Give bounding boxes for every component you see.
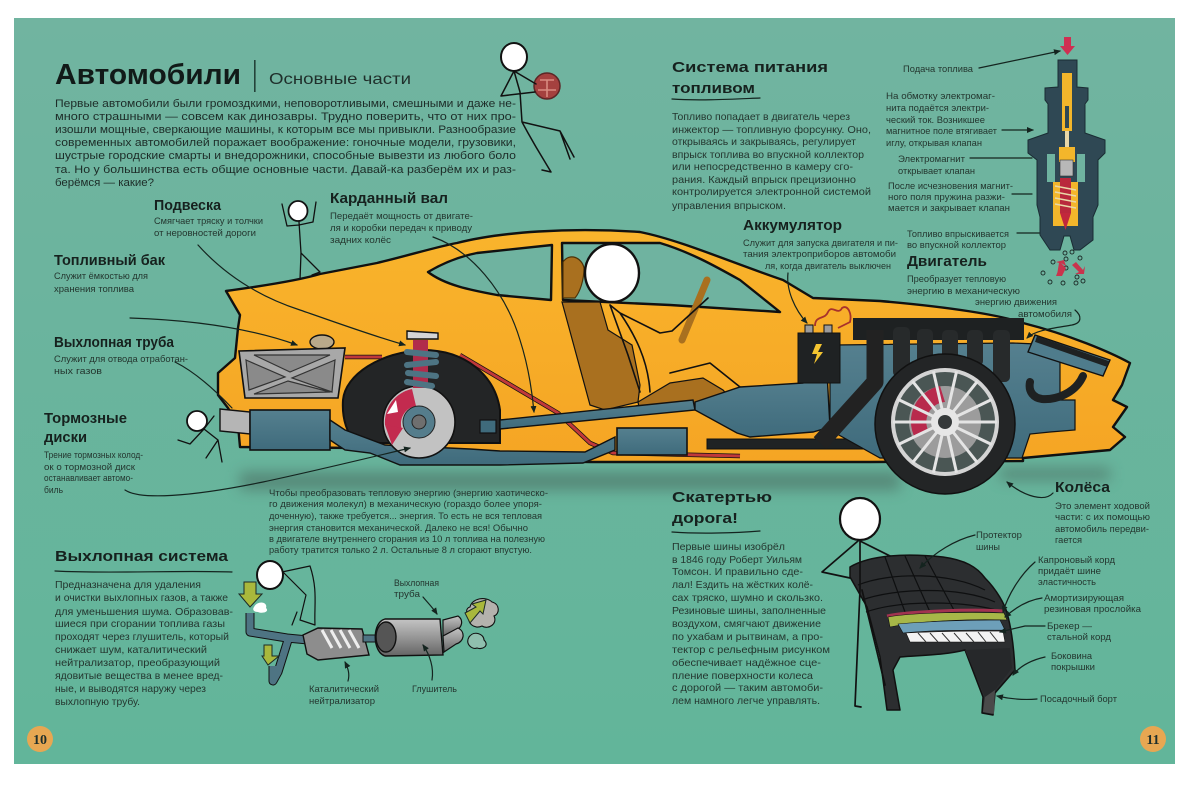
label: brake discs: диски [44,429,87,446]
exhaust system diagram: Глушитель [412,684,457,695]
heading: Скатертью [672,489,772,506]
label: wheels: части: с их помощью [1055,512,1150,523]
label: brake discs: останавливает автомо- [44,473,133,484]
paragraph: thermal energy: доченную), также требуется... энергия. То есть не вся тепловая [269,511,542,522]
label: wheels: гается [1055,535,1082,546]
exhaust system diagram [239,561,498,707]
intro paragraph: изошли мощные, сверкающие машины, к которым все мы привыкли. Разнообразие [55,124,516,136]
tire arrows [920,535,1045,699]
diagram labels: Выхлопная [394,578,439,589]
arrow: driveshaft [433,237,534,412]
icon: stick figure with steering wheel [501,43,574,172]
body text: лем намного легче управлять. [672,695,820,707]
injector labels: Электромагнит [898,154,966,165]
body text: нейтрализатор, преобразующий [55,657,220,669]
injector labels: ного поля пружина разжи- [888,192,1005,203]
injector diagram [1028,37,1105,285]
intro paragraph: та. Но у большинства есть общие основные части. Давай-ка разберём их и раз- [55,164,516,176]
injector labels [886,64,1013,251]
body text: Топливо попадает в двигатель через [672,111,850,123]
icon: stick figure on tire [822,498,890,707]
body text: по ухабам и рытвинам, а про- [672,631,824,643]
tire labels: резиновая прослойка [1044,604,1142,615]
label: battery: ля, когда двигатель выключен [765,261,891,272]
heading: Выхлопная система [55,548,229,565]
arrow: brake discs [125,448,410,496]
intro paragraph: современных автомобилей поражает воображение: гоночные модели, грузовики, [55,137,516,149]
rubber layer [887,610,1003,616]
label: exhaust pipe: ных газов [54,366,102,377]
injector fuel channel [1062,73,1072,131]
title: Автомобили [55,59,241,91]
battery [798,307,851,383]
catalytic converter [303,628,369,660]
body text: ные, и выводятся наружу через [55,683,206,695]
label: wheels: автомобиль передви- [1055,524,1149,535]
arrow: engine [1027,310,1080,338]
label: brake discs: ок о тормозной диск [44,462,136,473]
exhaust tail pipe [220,409,250,434]
paragraph: thermal energy: Чтобы преобразовать тепловую энергию (энергию хаотическо- [269,488,548,499]
transmission [695,373,830,437]
injector labels: На обмотку электромаг- [886,91,995,102]
body text: Резиновые шины, заполненные [672,605,826,617]
front muffler [617,428,687,455]
exhaust system diagram: нейтрализатор [309,696,375,707]
page number 10: 10 [33,733,47,748]
arrow: exhaust pipe [175,362,232,408]
arrow: suspension [198,245,405,345]
label: battery: Аккумулятор [743,217,842,234]
tire labels: покрышки [1051,662,1095,673]
tail pipes [443,616,463,652]
tire inner sidewall [965,648,1012,697]
label: suspension: Подвеска [154,197,222,214]
label: wheels: Колёса [1055,479,1111,496]
body text: тектор с рельефным рисунком [672,644,830,656]
label: wheels: Это элемент ходовой [1055,501,1150,512]
label: exhaust pipe: Служит для отвода отработан- [54,354,188,365]
label: brake discs: Тормозные [44,410,127,427]
tire labels: эластичность [1038,577,1096,588]
tire labels: стальной корд [1047,632,1111,643]
injector labels: Топливо впрыскивается [907,229,1009,240]
label: engine: автомобиля [1018,309,1072,320]
stick figure [257,561,315,625]
injector labels: во впускной коллектор [907,240,1006,251]
label: driveshaft: ля и коробки передач к приводу [330,223,472,234]
label: driveshaft: задних колёс [330,235,391,246]
tire labels: Протектор [976,530,1022,541]
icon: stick figure near brake discs [178,411,222,462]
label: engine [907,253,1072,320]
intro paragraph: берёмся — какие? [55,177,154,189]
body text: выхлопную трубу. [55,696,140,708]
injector labels: нита подаётся электри- [886,103,989,114]
car illustration [218,230,1130,494]
body text: сах тряско, шумно и скользко. [672,592,823,604]
label: brake discs: Трение тормозных колод- [44,450,143,461]
body text: и очистки выхлопных газов, а также [55,592,228,604]
front wheel [875,354,1015,494]
seat [562,257,730,412]
label: suspension: от неровностей дороги [154,228,256,239]
injector labels: Подача топлива [903,64,974,75]
body text: шиеся при сгорании топлива газы [55,618,225,630]
heading underline [55,571,232,572]
tire diagram [850,555,1015,715]
injector labels: магнитное поле втягивает [886,126,998,137]
label: suspension: Смягчает тряску и толчки [154,216,263,227]
drive shaft [500,400,695,429]
label: exhaust pipe: Выхлопная труба [54,334,175,351]
body text: ядовитые вещества в менее вред- [55,670,223,682]
section: tires heading and text [672,489,830,707]
body text [672,541,830,707]
body text: для уменьшения шума. Образовав- [55,606,234,618]
injector arrows [970,51,1060,233]
label: fuel tank [54,252,165,295]
page number 10 [27,726,53,752]
body text: Первые шины изобрёл [672,541,785,553]
exhaust pipe [330,420,615,465]
injector labels: мается и закрывает клапан [888,203,1010,214]
label: brake discs: биль [44,485,63,496]
tire labels: Брекер — [1047,621,1093,632]
title divider [254,60,256,92]
injector windows [1047,154,1055,182]
lower black rod [707,439,887,449]
label: suspension [154,197,263,239]
tire labels: Амортизирующая [1044,593,1124,604]
connecting pipe [363,635,381,642]
body text: в 1846 году Роберт Уильям [672,554,802,566]
label: exhaust pipe [54,334,188,377]
tire labels: Боковина [1051,651,1093,662]
body text: контролируется электронной системой [672,186,871,198]
injector body [1028,60,1105,250]
label: engine: энергию в механическую [907,286,1020,297]
icon: stick figure near suspension [282,201,320,280]
diagram arrows [423,597,437,614]
fuel feed arrow [1060,37,1075,55]
arrow: fuel tank [130,318,297,345]
body text: инжектор — топливную форсунку. Оно, [672,124,871,136]
driver figure [585,244,780,410]
label: engine: Преобразует тепловую [907,274,1006,285]
label: engine: Двигатель [907,253,987,270]
body text: воздухом, смягчают движение [672,618,821,630]
section: tires heading and text: дорога! [672,510,738,527]
rear muffler [250,410,330,450]
tire bead [983,690,995,714]
label: fuel tank: хранения топлива [54,284,135,295]
body text: впрыск топлива во впускной коллектор [672,149,864,161]
paragraph: thermal energy: в двигателе внутреннего сгорания из 10 л топлива на полезную [269,534,545,545]
label: driveshaft: Передаёт мощность от двигате- [330,211,473,222]
label: wheels [1055,479,1150,546]
label: battery: тания электроприборов автомоби [743,249,896,260]
section: exhaust system [55,548,234,708]
body text: обеспечивает надёжное сце- [672,657,822,669]
body text: с дорогой — таким автомоби- [672,682,824,694]
body text: пление поверхности колеса [672,670,813,682]
arrow: battery [788,273,807,323]
exhaust system diagram: Каталитический [309,684,379,695]
nylon cord layer [888,612,1007,627]
label: driveshaft: Карданный вал [330,190,448,207]
label: fuel tank: Служит ёмкостью для [54,271,148,282]
body text [55,579,234,708]
label: driveshaft [330,190,473,246]
paragraph: thermal energy: работу тратится только 2 л. Остальные 8 л сгорают впустую. [269,545,532,556]
radiator [1028,335,1110,399]
smoke puff [253,603,267,613]
fuel tank [239,335,345,398]
page number 11 [1140,726,1166,752]
tire cross-section [850,555,1015,715]
rear wheel arch [343,350,500,443]
section: fuel system [672,59,871,212]
intro paragraph: много страшными — совсем как динозавры. Трудно поверить, что от них про- [55,111,516,123]
exhaust clouds [467,599,498,649]
steel cord hatching [918,632,998,642]
body text: лал! Ездить на жёстких колё- [672,579,813,591]
label: engine: энергию движения [975,297,1057,308]
injector labels: открывает клапан [898,166,975,177]
injector spring chamber [1053,182,1078,213]
exhaust piping [250,613,308,681]
injector valve [1060,160,1073,176]
green arrows [239,582,486,665]
rear brake assembly [383,386,455,458]
body text: или непосредственно в камеру сго- [672,161,854,173]
body text: Томсон. И правильно сде- [672,566,804,578]
intro paragraph: Первые автомобили были громоздкими, неповоротливыми, смешными и даже не- [55,98,516,110]
injector labels: ческий ток. Возникшее [886,115,985,126]
steel cord layer [906,631,1005,642]
injector labels: иглу, открывая клапан [886,138,982,149]
intro paragraph: шустрые городские смарты и внедорожники, способные вывезти из любого боло [55,150,516,162]
front side window [562,243,780,312]
tire labels: шины [976,542,1000,553]
subtitle: Основные части [269,71,411,88]
tire labels: придаёт шине [1038,566,1101,577]
body text: Предназначена для удаления [55,579,201,591]
label: battery: Служит для запуска двигателя и пи- [743,238,898,249]
tire labels [976,530,1142,705]
intro paragraph [55,98,516,189]
heading underline [672,531,760,533]
label: fuel tank: Топливный бак [54,252,165,269]
tire labels: Посадочный борт [1040,694,1118,705]
body text: снижает шум, каталитический [55,644,207,656]
exhaust system diagram: труба [394,589,421,600]
label: battery [743,217,898,272]
engine bay [820,318,1075,458]
arrow: wheels [1007,482,1053,497]
car body [218,230,1130,462]
tire tread grooves [858,556,1003,612]
heading underline [672,98,760,100]
section: fuel system: топливом [672,80,755,97]
red fuel line [345,355,740,456]
title block [55,59,411,92]
paragraph: thermal energy [269,488,548,556]
page number 11: 11 [1146,733,1160,748]
rear side window [428,245,552,300]
body text: управления впрыском. [672,200,786,212]
universal joint [480,420,496,433]
injector labels: После исчезновения магнит- [888,181,1013,192]
body text: рания. Каждый впрыск прецизионно [672,174,856,186]
leader lines [125,237,1080,497]
paragraph: thermal energy: энергия становится механической. Далеко не вся! Обычно [269,523,528,534]
muffler [375,619,443,656]
body text [672,111,871,212]
tire labels: Капроновый корд [1038,555,1115,566]
heading: Система питания [672,59,828,76]
body text: проходят через глушитель, который [55,631,229,643]
paragraph: thermal energy: го движения молекул) в механическую (гораздо более упоря- [269,499,542,510]
body text: открываясь и закрываясь, регулирует [672,136,856,148]
suspension spring [407,331,438,388]
fuel spray [1041,250,1085,285]
car ground shadow [240,468,1110,490]
label: brake discs [44,410,143,496]
spray arrows [1056,260,1066,276]
breaker layer [898,620,1005,633]
